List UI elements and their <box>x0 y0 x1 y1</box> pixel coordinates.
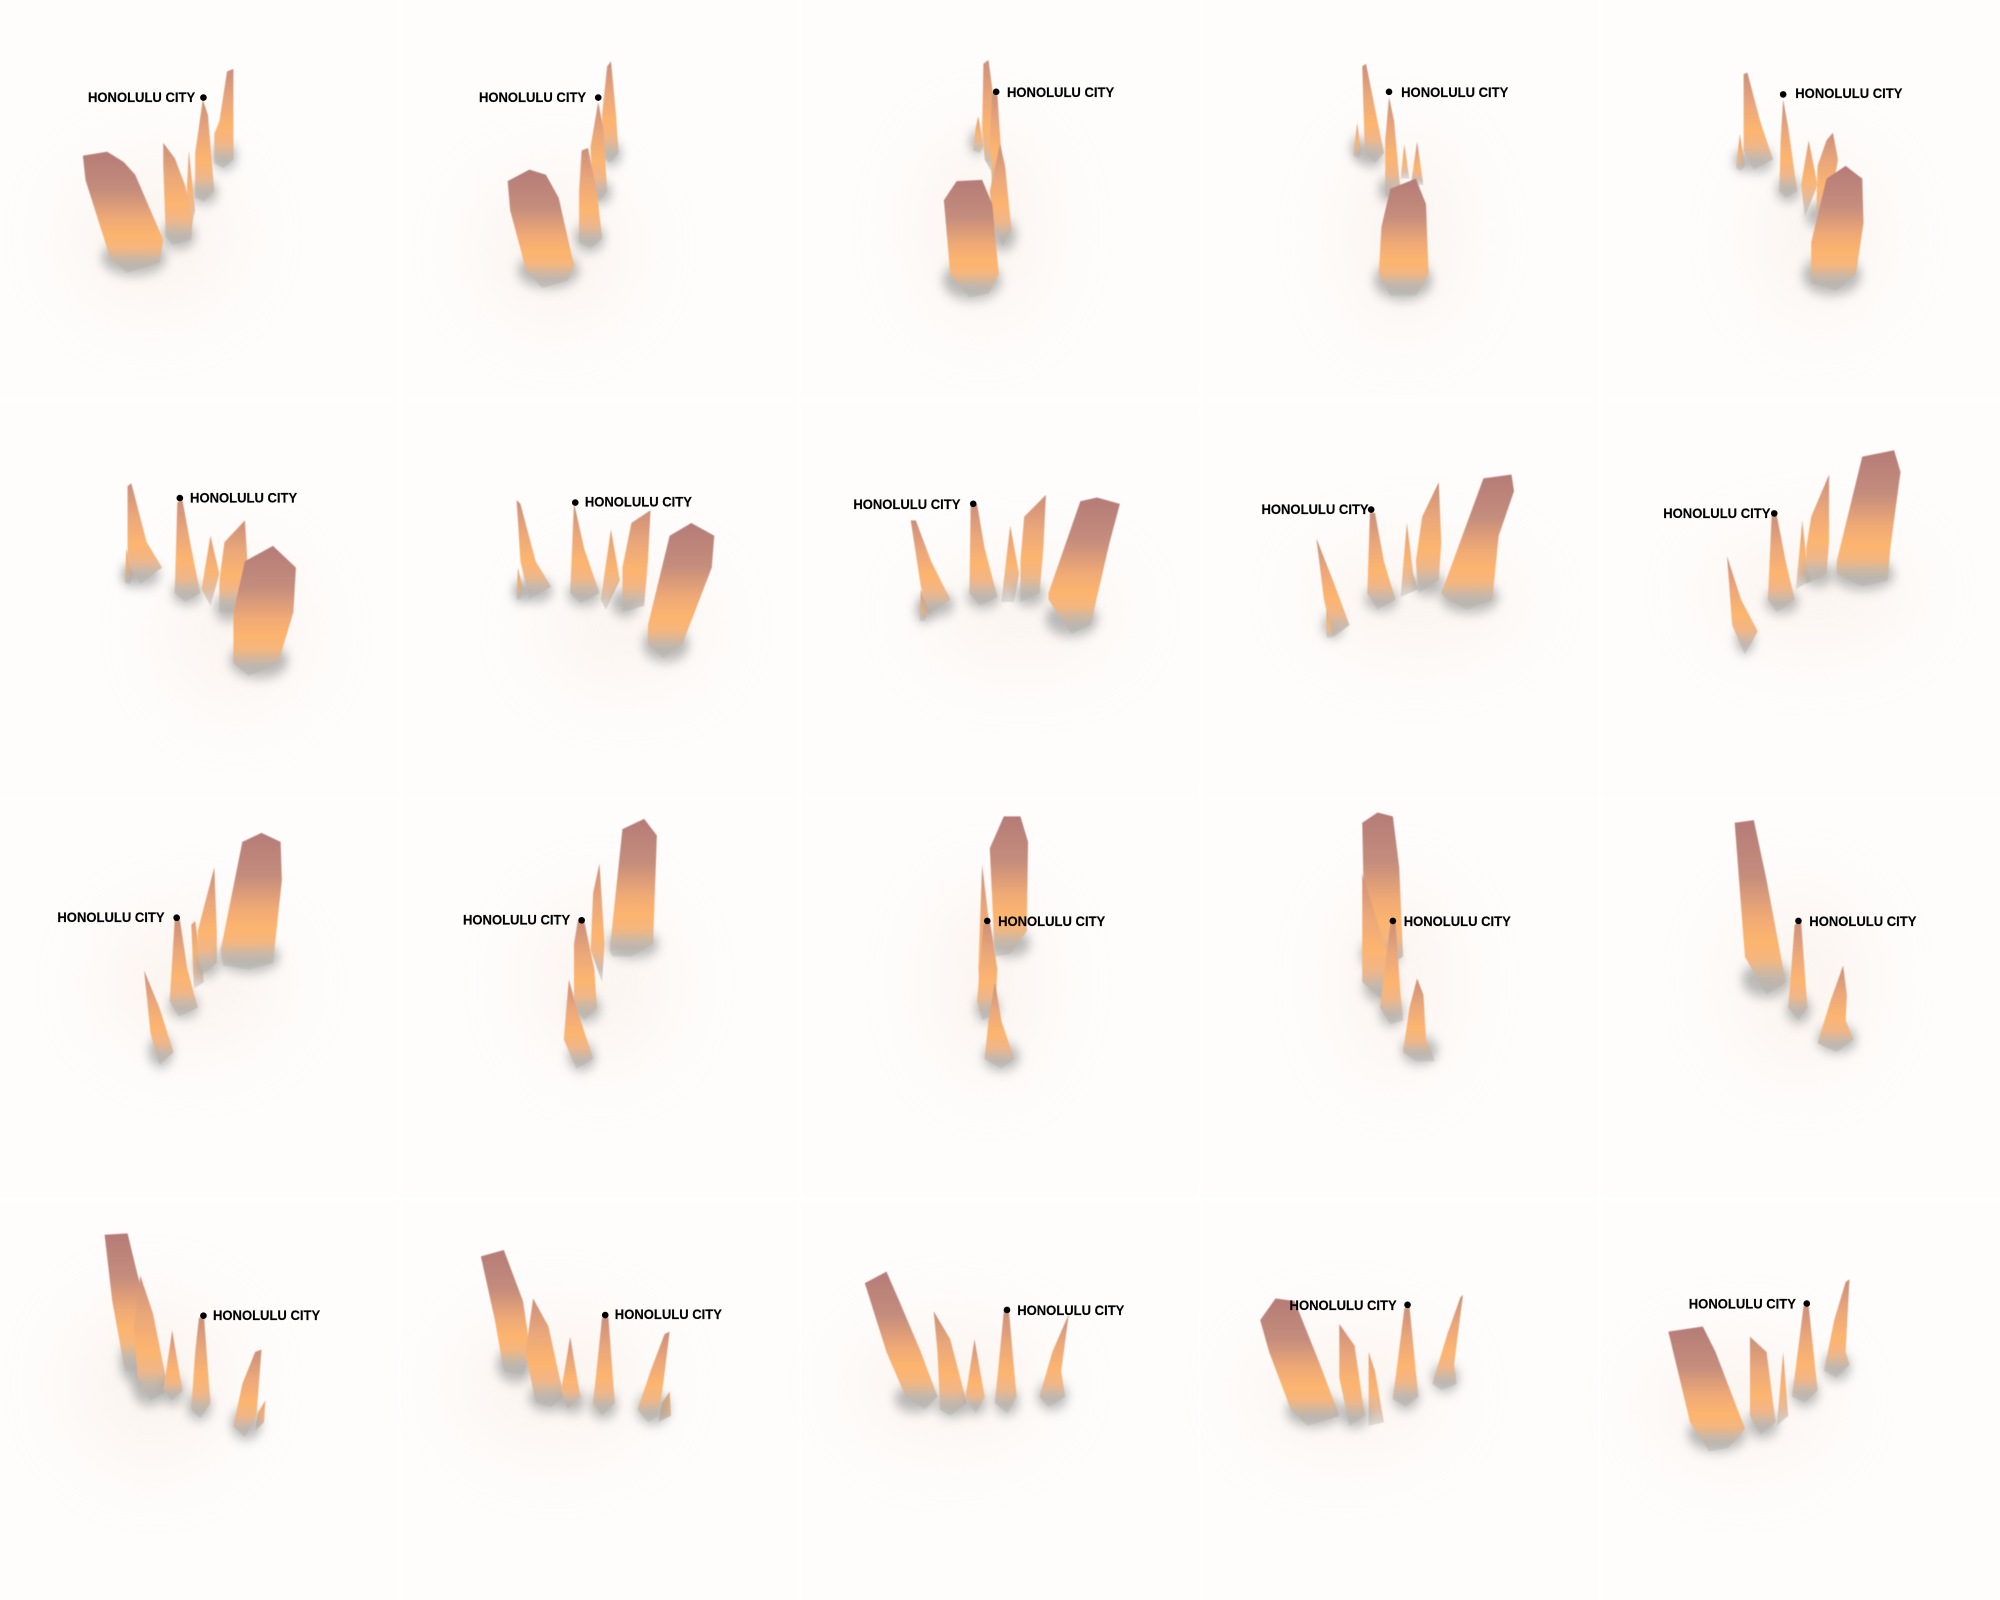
label: HONOLULU CITY <box>1809 913 1917 929</box>
location dot <box>177 495 183 501</box>
label: HONOLULU CITY <box>57 909 165 925</box>
label: HONOLULU CITY <box>615 1306 723 1322</box>
panel 19 <box>1243 1295 1463 1456</box>
panel 20 <box>1646 1279 1851 1469</box>
label: HONOLULU CITY <box>853 496 961 512</box>
terrain spikes <box>942 60 1017 300</box>
terrain spikes <box>83 69 237 275</box>
label: HONOLULU CITY <box>463 912 571 928</box>
terrain spikes <box>105 1233 265 1440</box>
location dot <box>984 918 991 924</box>
terrain spikes <box>1735 820 1857 1053</box>
terrain spikes <box>121 483 296 679</box>
panel 1 <box>65 69 241 317</box>
label: HONOLULU CITY <box>1795 85 1903 101</box>
terrain spikes <box>513 500 714 662</box>
terrain spikes <box>911 495 1120 636</box>
terrain spikes <box>975 816 1030 1071</box>
label: HONOLULU CITY <box>1663 505 1771 521</box>
terrain spikes <box>1316 474 1514 638</box>
terrain spikes <box>1733 73 1864 295</box>
panel 14 <box>1338 812 1511 1085</box>
panel 17 <box>452 1250 723 1457</box>
label: HONOLULU CITY <box>998 913 1106 929</box>
location dot <box>1368 506 1374 513</box>
panel 5 <box>1733 73 1903 324</box>
location dot <box>993 89 999 95</box>
location dot <box>1390 918 1396 924</box>
terrain spikes <box>1727 450 1901 654</box>
location dot <box>200 94 207 101</box>
location dot <box>173 914 180 921</box>
panel 9 <box>1261 474 1526 658</box>
label: HONOLULU CITY <box>585 493 693 509</box>
location dot <box>1780 91 1786 98</box>
terrain spikes <box>1668 1279 1851 1452</box>
label: HONOLULU CITY <box>1689 1296 1797 1312</box>
location dot <box>970 501 977 507</box>
location dot <box>1404 1302 1411 1308</box>
location dot <box>602 1312 609 1318</box>
terrain spikes <box>481 1250 671 1424</box>
panel 8 <box>853 495 1123 671</box>
location dot <box>578 917 585 924</box>
label: HONOLULU CITY <box>190 490 298 506</box>
location dot <box>1795 918 1802 924</box>
location dot <box>1004 1307 1010 1313</box>
label: HONOLULU CITY <box>1007 84 1115 100</box>
label: HONOLULU CITY <box>479 89 587 105</box>
panel 7 <box>513 493 714 691</box>
label: HONOLULU CITY <box>1401 84 1509 100</box>
terrain spikes <box>564 819 659 1071</box>
location dot <box>1771 510 1778 517</box>
panel 6 <box>121 483 309 712</box>
location dot <box>1803 1300 1810 1307</box>
location dot <box>1386 89 1392 95</box>
panel 4 <box>1341 64 1509 339</box>
label: HONOLULU CITY <box>1017 1302 1125 1318</box>
panel 16 <box>65 1233 321 1472</box>
panel 10 <box>1663 450 1921 654</box>
panel 11 <box>57 833 287 1067</box>
terrain spikes <box>865 1272 1069 1417</box>
panel 12 <box>463 819 673 1071</box>
panel 3 <box>916 60 1115 332</box>
label: HONOLULU CITY <box>1261 501 1369 517</box>
label: HONOLULU CITY <box>213 1307 321 1323</box>
terrain spikes <box>1260 1295 1463 1428</box>
panel 2 <box>474 61 636 329</box>
location dot <box>572 499 579 506</box>
label: HONOLULU CITY <box>88 89 196 105</box>
panel 15 <box>1725 820 1917 1077</box>
panel 18 <box>848 1272 1125 1450</box>
label: HONOLULU CITY <box>1404 913 1511 929</box>
location dot <box>595 94 602 101</box>
panel 13 <box>930 816 1106 1085</box>
terrain spikes <box>1351 64 1433 300</box>
terrain spikes <box>508 61 622 288</box>
location dot <box>200 1312 207 1319</box>
label: HONOLULU CITY <box>1290 1297 1397 1313</box>
terrain spikes <box>1360 812 1438 1064</box>
terrain spikes <box>144 833 282 1067</box>
